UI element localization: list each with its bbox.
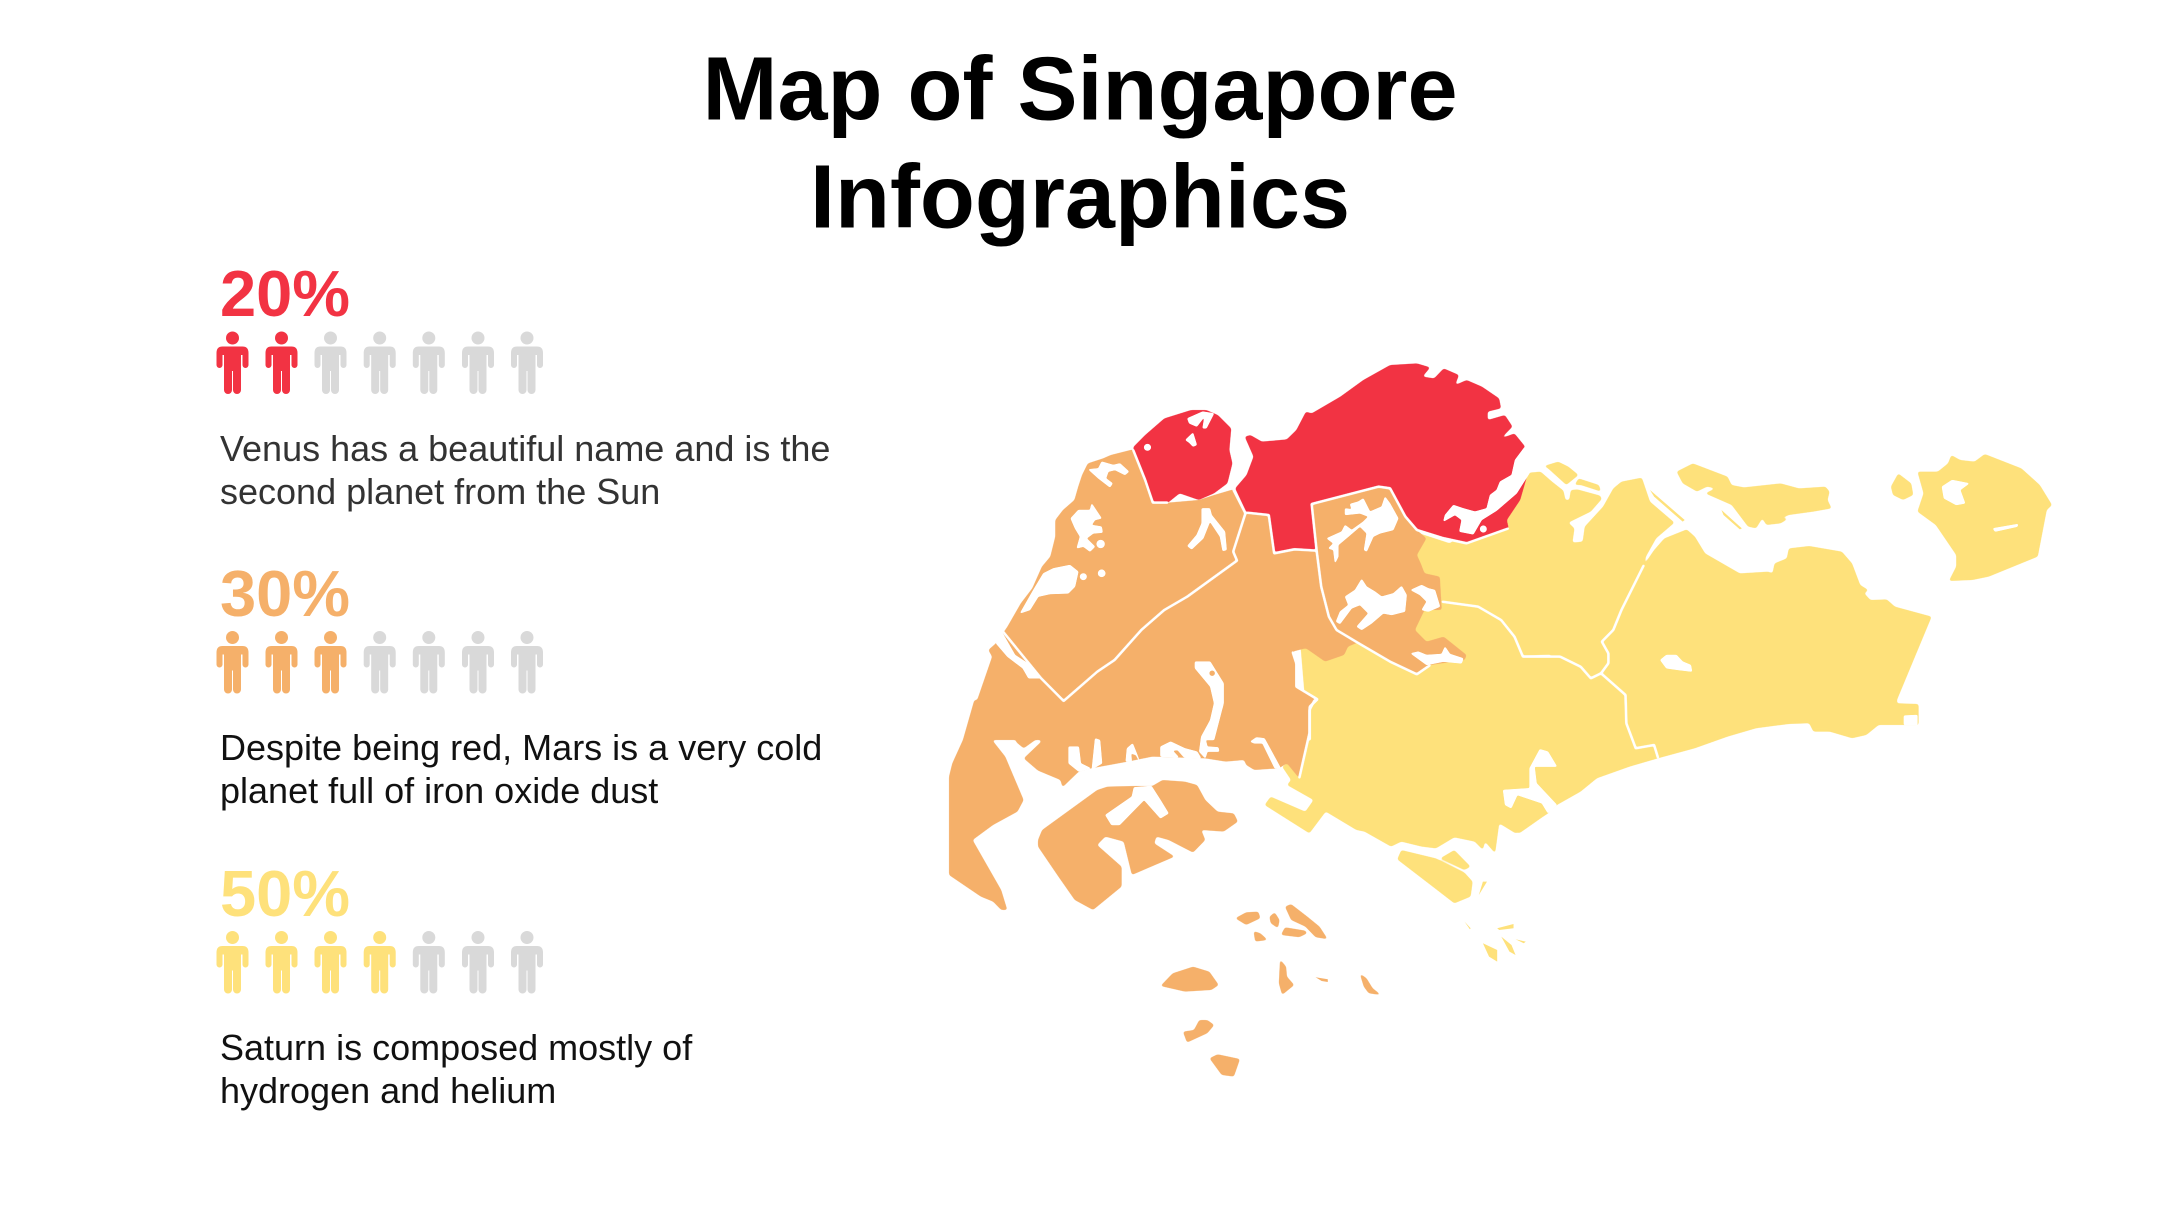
islets: yellow slivers	[1316, 490, 1742, 982]
region: yellow 50%	[1265, 454, 2052, 903]
description: Saturn: Saturn is composed mostly of	[220, 1027, 693, 1068]
title: Map of Singapore	[702, 40, 1458, 140]
region boundaries	[1002, 449, 1658, 778]
pictogram: 4 of 7 people	[216, 931, 543, 994]
pictogram: 2 of 7 people	[216, 332, 543, 394]
islands: southern islands	[1160, 904, 1382, 1077]
title	[702, 40, 1458, 248]
description: Venus: second planet from the Sun	[220, 471, 660, 512]
land regions	[949, 363, 2052, 1077]
description: Saturn: hydrogen and helium	[220, 1070, 556, 1111]
panel: 50% statistic	[216, 857, 693, 1111]
description: Mars: Despite being red, Mars is a very cold	[220, 727, 822, 768]
description: Mars: planet full of iron oxide dust	[220, 770, 658, 811]
panel: 20% statistic	[216, 257, 830, 512]
title: Infographics	[810, 148, 1350, 248]
pictogram: 3 of 7 people	[216, 631, 543, 694]
percentage: 20%: 20%	[220, 257, 350, 330]
percentage: 30%: 30%	[220, 557, 350, 630]
panel: 30% statistic	[216, 557, 822, 811]
region: red 20%	[1133, 363, 1528, 553]
percentage: 50%: 50%	[220, 857, 350, 930]
map of Singapore	[949, 363, 2052, 1077]
region: orange 30%	[949, 449, 1467, 1077]
description: Venus: Venus has a beautiful name and is the	[220, 428, 830, 469]
